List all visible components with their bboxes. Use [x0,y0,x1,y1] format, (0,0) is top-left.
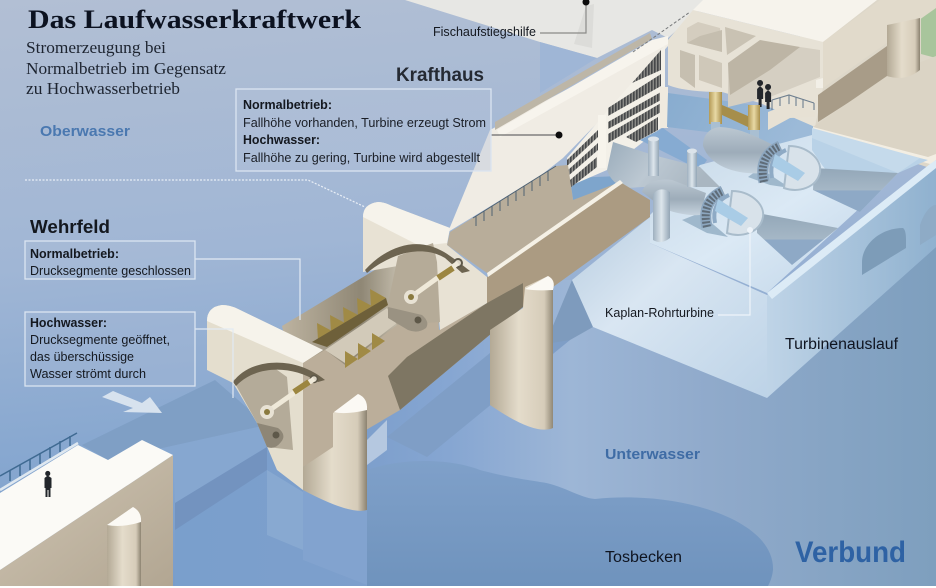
panel: powerhouse building [668,0,936,164]
panel: Wehrfeld flood operation box: Hochwasser: [30,315,107,330]
label: Turbinenauslauf: Turbinenauslauf [785,336,899,353]
panel: turbine hall floor [650,128,928,293]
heading: Wehrfeld: Wehrfeld [30,216,110,237]
darker lower face [388,283,523,410]
side face lower [303,350,345,467]
panel: flow channel bands [82,380,367,585]
railing [0,433,78,490]
panel: right river bank [800,0,936,170]
panel: trash racks [567,45,668,188]
panel: Wehrfeld flood operation box [25,312,195,386]
label: Tosbecken: Tosbecken [605,549,682,566]
label: Kaplan-Rohrturbine: Kaplan-Rohrturbine [605,305,714,320]
rear pillar [490,276,554,430]
panel: outlet tubes [757,168,898,265]
people [757,80,771,109]
panel: Krafthaus info box: Fallhöhe vorhanden, Turbine erzeugt Strom [243,115,486,130]
panel: Wehrfeld normal operation box: Drucksegmente geschlossen [30,263,191,278]
side face [303,283,523,467]
logo: Verbund: Verbund [795,536,906,569]
bank edge [813,127,936,164]
dark wedge next to turbine block [540,280,593,357]
sill light patch [325,308,397,363]
panel: lower Kaplan turbine [607,136,763,242]
panel: Krafthaus info box: Hochwasser: [243,132,320,147]
railing [473,166,556,226]
dark band behind pier [387,340,570,457]
vertical shaft [653,189,670,242]
label: Fischaufstiegshilfe: Fischaufstiegshilfe [433,25,536,39]
marker dots [556,0,753,233]
panel: turbine hall front faces [572,160,936,398]
panel: top river bank [405,0,710,93]
panel: Wehrfeld flood operation box: Wasser strömt durch [30,366,146,381]
heading: Krafthaus: Krafthaus [396,65,484,86]
panel: headrace water by racks [570,176,620,206]
subtitle: zu Hochwasserbetrieb [26,79,180,98]
pillar [107,507,141,586]
panel: Krafthaus info box: Fallhöhe zu gering, Turbine wird abgestellt [243,150,480,165]
rear segment arc [365,244,470,273]
panel: brown side wall [487,180,650,307]
panel: Wehrfeld flood operation box: das überschüssige [30,349,134,364]
panel: lower tailwater [175,247,936,586]
light pool below pier [367,420,387,465]
panel: Wehrfeld normal operation box [25,241,195,279]
panel: Wehrfeld normal operation box: Normalbetrieb: [30,246,119,261]
panel: upper Kaplan turbine [703,92,820,190]
front gate [233,367,293,450]
panel: fish ladder and embankment deck [448,12,690,232]
bay interior [282,250,440,405]
label: Oberwasser: Oberwasser [40,123,130,140]
panel: Krafthaus info box [236,89,491,171]
pillar [887,18,920,78]
outlet arch [862,228,906,275]
front pier [207,305,323,490]
panel: Krafthaus info box: Normalbetrieb: [243,97,332,112]
subtitle [26,38,226,98]
bank grass patch [921,4,936,58]
rooms [680,22,820,107]
upper pier [363,202,487,330]
underside shadow [818,46,887,122]
callout lines [25,3,750,398]
lever rear [388,307,427,332]
title: Das Laufwasserkraftwerk [28,5,362,34]
gallery railing [772,95,814,110]
panel: beige embankment wall [447,165,620,273]
subtitle: Stromerzeugung bei [26,38,166,57]
label: Unterwasser: Unterwasser [605,446,700,463]
subtitle: Normalbetrieb im Gegensatz [26,59,226,78]
panel: turbine hall water [640,93,813,170]
front pillar [303,394,367,511]
panel: Wehrfeld flood operation box: Drucksegmente geöffnet, [30,332,170,347]
panel: lower left embankment [0,433,173,586]
stepped teeth [317,289,386,368]
stilling basin [367,461,773,586]
arrow: water flow [102,391,162,413]
panel: weir structure [207,202,554,511]
person [44,471,52,497]
